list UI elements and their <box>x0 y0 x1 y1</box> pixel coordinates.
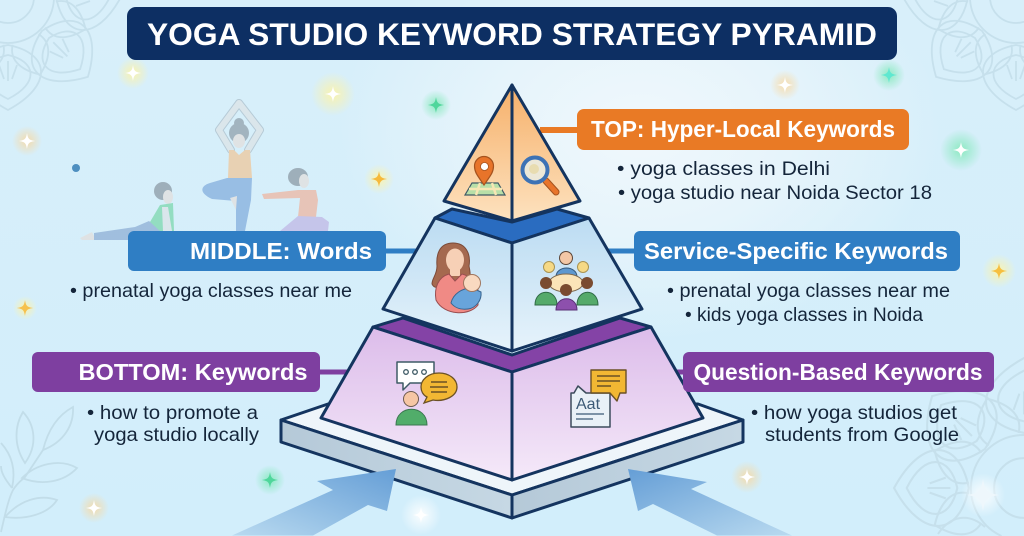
text: top keywords: • yoga studio near Noida Sector 18 <box>618 182 932 204</box>
figure: cobra pose <box>80 182 174 240</box>
figure: lunge pose <box>262 168 329 231</box>
label: service-specific: Service-Specific Keywords <box>644 238 948 264</box>
decorative mandala: bottom right <box>893 357 1024 536</box>
text: top keywords: • yoga classes in Delhi <box>617 158 830 180</box>
label: top: TOP: Hyper-Local Keywords <box>591 116 895 142</box>
text: service-specific keywords: • prenatal yoga classes near me <box>667 280 950 302</box>
label: service-specific <box>634 231 960 271</box>
growth arrow right <box>628 469 792 536</box>
connector: middle left label <box>380 248 420 254</box>
text: question-based keywords: • how yoga studios get <box>751 402 958 424</box>
text: bottom left keywords <box>87 402 259 446</box>
text: question-based keywords <box>751 402 959 446</box>
yoga figures illustration <box>80 103 329 240</box>
connector: middle right label <box>600 248 640 254</box>
bottom tier <box>321 318 703 480</box>
title banner: YOGA STUDIO KEYWORD STRATEGY PYRAMID <box>147 16 877 52</box>
decorative leaf branch <box>1 407 77 532</box>
title banner <box>127 7 897 60</box>
connector: top label <box>540 127 580 133</box>
label: bottom keywords <box>32 352 320 392</box>
text: top keywords <box>617 158 932 204</box>
middle tier <box>383 209 642 351</box>
label: middle words: MIDDLE: Words <box>190 238 372 264</box>
decorative mandala: top left <box>0 0 120 111</box>
text: middle left keyword: • prenatal yoga classes near me <box>70 280 352 302</box>
label: top <box>577 109 909 150</box>
icon: text and chat bubbles <box>571 370 626 427</box>
text: bottom left keywords: • how to promote a <box>87 402 258 424</box>
text: service-specific keywords: • kids yoga classes in Noida <box>685 304 923 326</box>
icon: magnifying glass <box>522 158 556 192</box>
base platform <box>281 404 743 518</box>
icon glyph: Aat: Aat <box>576 396 601 413</box>
connector: bottom left label <box>315 370 350 374</box>
label: question-based <box>683 352 994 392</box>
growth arrow left <box>232 469 396 536</box>
label: middle words <box>128 231 386 271</box>
label: question-based: Question-Based Keywords <box>694 359 982 385</box>
decorative mandala: top right <box>904 0 1024 111</box>
connector: bottom right label <box>670 370 690 374</box>
icon: mother and baby <box>432 243 481 313</box>
text: question-based keywords: students from Google <box>765 424 959 446</box>
icon: person speaking with chat bubbles <box>396 362 457 425</box>
text: service-specific keywords <box>667 280 950 326</box>
icon: location pin on map <box>465 156 505 195</box>
pyramid <box>281 85 743 518</box>
icon: group meeting <box>535 252 598 310</box>
text: bottom left keywords: yoga studio locally <box>94 424 259 446</box>
label: bottom keywords: BOTTOM: Keywords <box>78 359 308 385</box>
top tier <box>444 85 580 221</box>
figure: tree pose <box>202 103 260 231</box>
